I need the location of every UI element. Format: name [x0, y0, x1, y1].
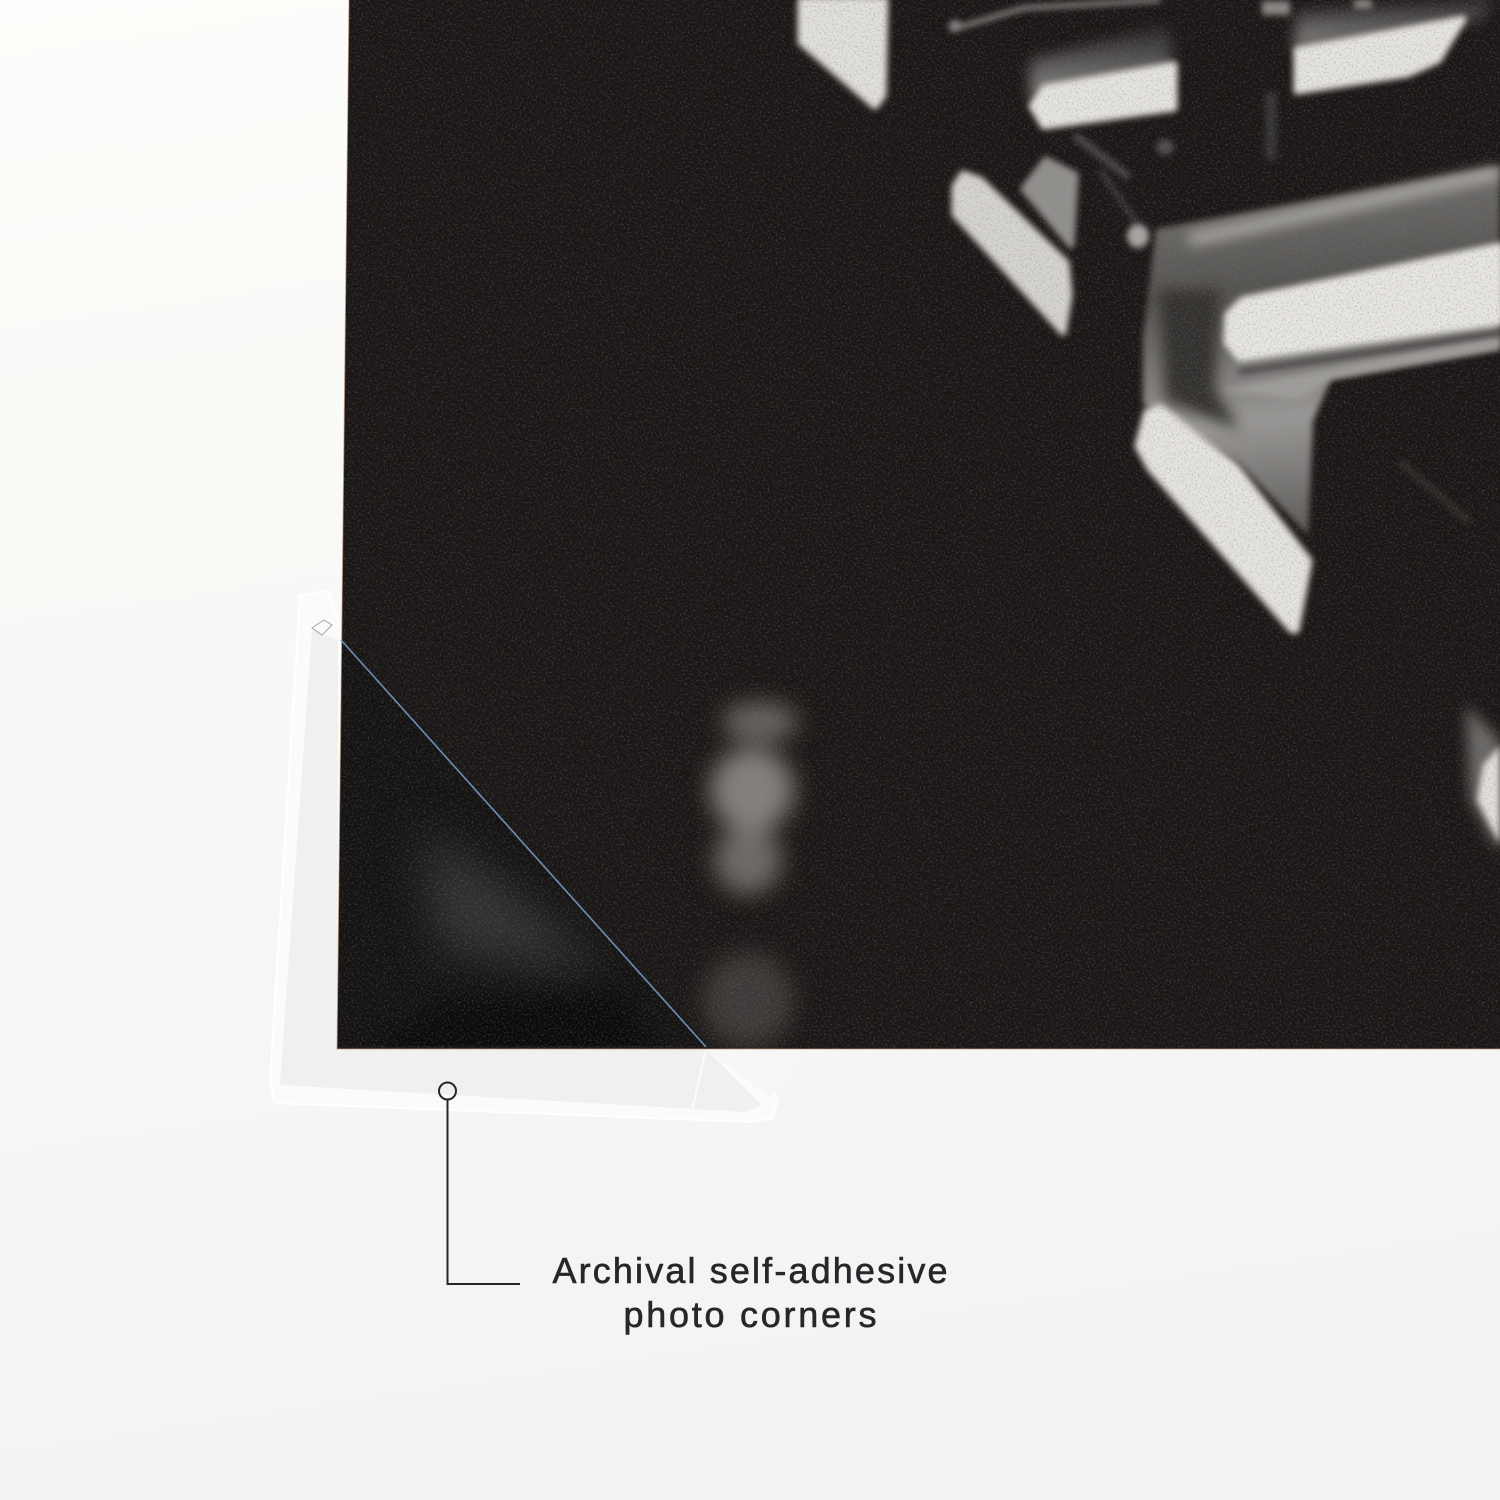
- leader line with ring marker: [439, 1082, 520, 1284]
- photo corner: clear archival sleeve: [270, 590, 803, 1122]
- large seat top edge highlight: [1189, 172, 1500, 240]
- grey seat back behind upper pill: [1030, 24, 1172, 100]
- large seat back: [1143, 166, 1500, 535]
- large seat pill highlight: [1227, 246, 1500, 358]
- dark line below seat pill: [1239, 333, 1500, 372]
- dark shade on large seat back: [1160, 290, 1240, 430]
- triangle dark band: [408, 1000, 632, 1046]
- top rail details: [949, 0, 1372, 32]
- callout label: photo corners: [624, 1294, 876, 1335]
- faint streak in dark seat: [1400, 462, 1470, 522]
- upper seat pill highlight: [1032, 65, 1174, 126]
- warm edge of print: [337, 0, 1500, 1049]
- top left seat cushion: [801, 0, 885, 106]
- top right seat highlight: [1297, 19, 1463, 91]
- small seat cushion: [955, 174, 1069, 332]
- triangle haze: [415, 838, 589, 979]
- seat bolt: [1127, 224, 1149, 248]
- faint struts under upper seat: [1074, 92, 1271, 225]
- band below seat pill: [1220, 335, 1500, 400]
- callout label: [552, 1250, 948, 1335]
- black and white photograph: [330, 0, 1500, 1060]
- bottom right halo: [1466, 705, 1500, 855]
- callout label: Archival self-adhesive: [552, 1250, 948, 1291]
- large seat arm highlight: [1138, 408, 1309, 630]
- bottom right seat highlight: [1477, 745, 1500, 845]
- photo base: dark print: [330, 0, 1500, 1050]
- grey seat side panel: [1024, 160, 1075, 245]
- blue edge of the corner: [341, 640, 706, 1047]
- print grain: [330, 0, 1500, 1050]
- triangle base: [340, 642, 342, 820]
- grey seat back top right: [1294, 0, 1500, 50]
- infographic: photo corner close-up: [269, 0, 1500, 1335]
- blurred figure in the background: [702, 702, 798, 1048]
- corner triangle over the photo: [340, 642, 656, 1046]
